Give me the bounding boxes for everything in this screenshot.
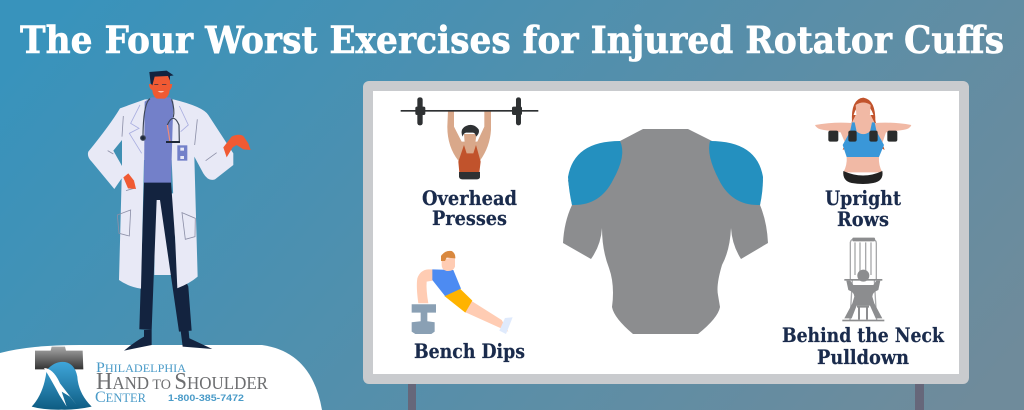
head [149,75,172,99]
coat arm gap [113,140,122,166]
billboard surface [373,91,959,374]
torso [563,129,768,334]
exercise: bench dips [412,251,513,334]
torso diagram [563,129,768,334]
badge [177,145,187,161]
midriff [843,157,882,172]
leg [464,300,508,332]
trousers [139,182,192,332]
billboard frame [363,81,969,384]
label: bench dips: Bench Dips [414,340,525,363]
label: presses: Presses [432,207,507,230]
coat [88,99,233,289]
logo: CENTER [95,389,147,406]
label: upright: Upright [825,187,901,210]
barbell [401,97,538,125]
bench [412,304,436,334]
head [442,257,455,271]
dumbbells [828,131,897,142]
hair [149,71,174,85]
head [857,270,869,282]
face [856,102,871,122]
face [154,84,166,86]
top [843,122,884,157]
arms and chest [815,115,911,145]
lapels [129,105,188,153]
exercise: overhead presses [401,97,538,179]
hair top [852,98,875,122]
shoes [124,330,212,351]
logo panel [0,345,322,410]
shorts [444,289,472,313]
billboard [363,81,969,410]
bar [844,279,882,281]
overhead press arms [447,111,491,161]
logo [32,347,268,410]
hair [462,125,479,137]
logo: HAND TO SHOULDER [96,369,268,395]
base [842,320,884,321]
head [464,134,477,147]
billboard legs [408,384,924,410]
hair [441,251,455,261]
label: pulldown: Pulldown [817,346,909,369]
arm [417,269,433,303]
label: behind the neck: Behind the Neck [782,324,944,347]
illustration: doctor [88,71,251,351]
label: rows: Rows [837,208,889,231]
stethoscope [141,99,180,142]
long hair [843,115,885,150]
logo text: PHILADELPHIA [96,360,187,376]
coat back panel [154,193,175,275]
icon: bell and hand [32,347,92,410]
shorts [459,172,480,179]
singlet [458,145,481,173]
exercise: behind the neck pulldown [842,238,884,321]
shoe [499,317,513,334]
right hand [223,135,251,157]
label: overhead presses: Overhead [422,187,517,210]
stool [857,306,869,320]
right shoulder highlight [709,141,763,205]
left hand [123,173,136,189]
logo: 1-800-385-7472 [168,393,244,403]
exercise: upright rows [815,98,911,184]
seated figure [844,281,882,318]
machine frame [850,239,877,320]
left shoulder highlight [568,141,622,205]
shorts [843,171,883,184]
machine top [852,238,875,241]
shirt [144,97,173,183]
coat details [108,116,217,239]
shirt [432,269,461,296]
